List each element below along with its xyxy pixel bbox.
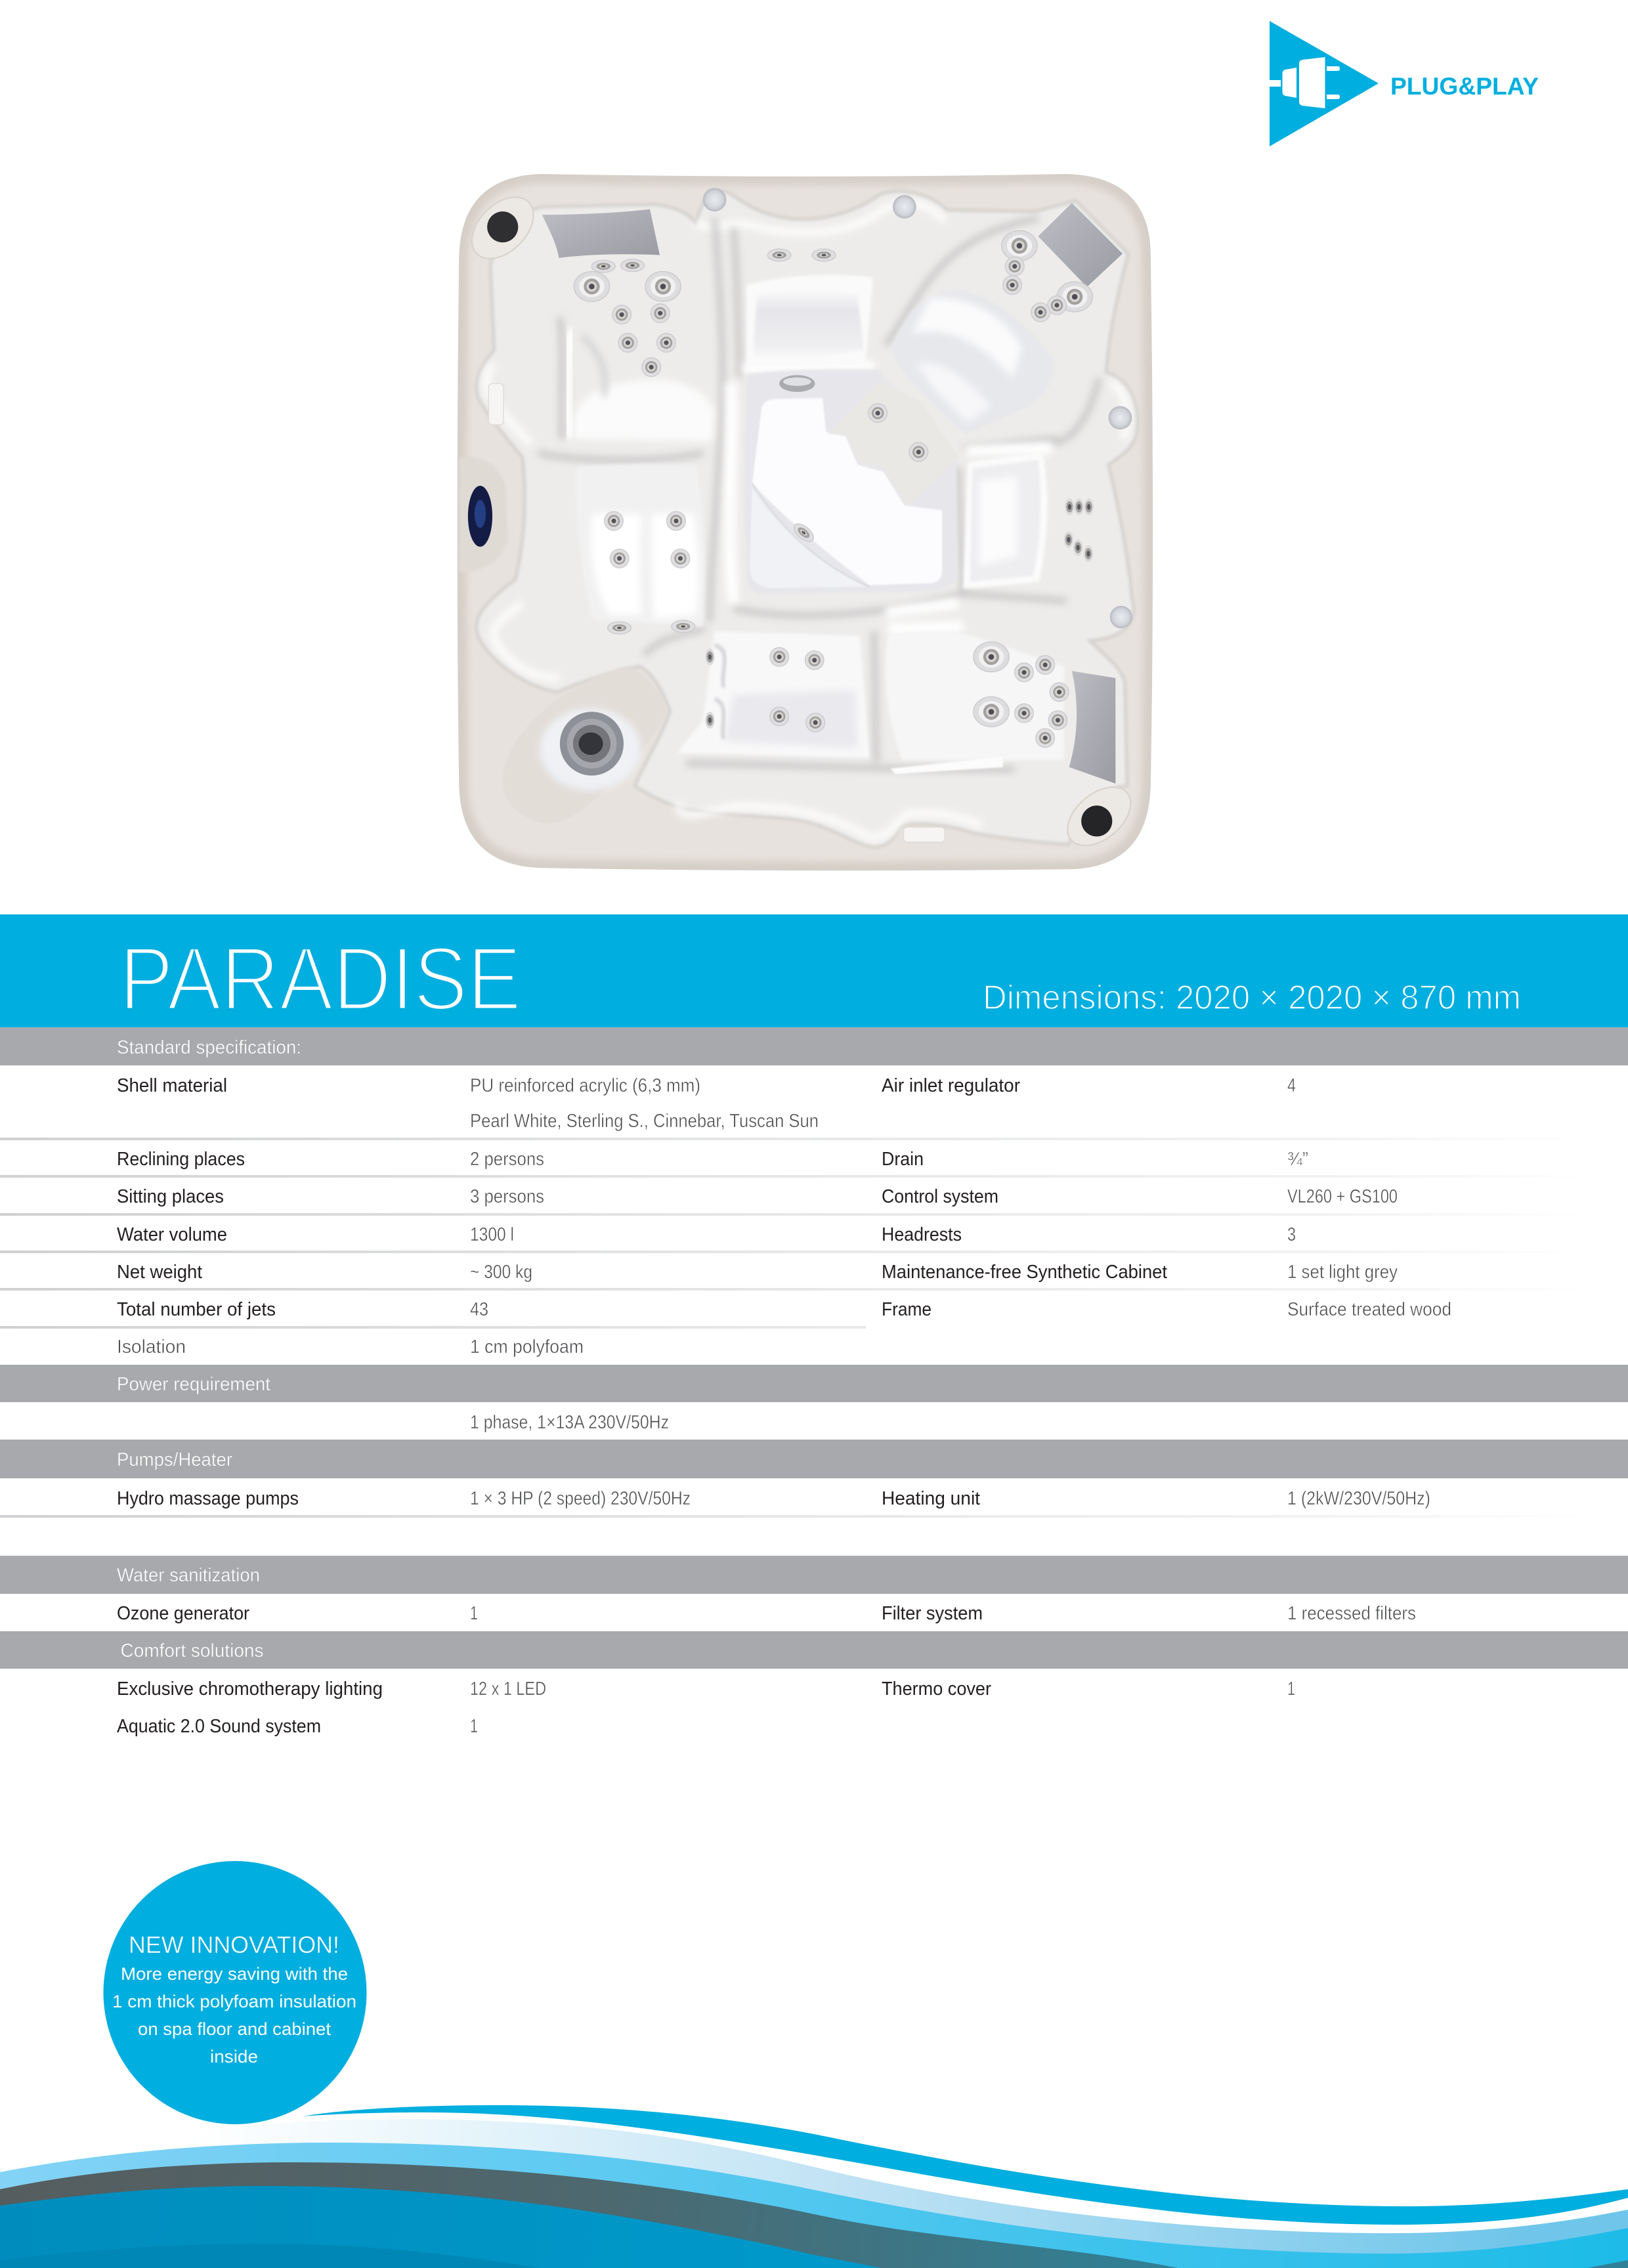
row: pumps and heating: Hydro massage pumps: [117, 1488, 299, 1509]
heading: comfort solutions: Comfort solutions: [121, 1640, 264, 1661]
section: power requirement: [117, 1374, 669, 1433]
row: lighting and cover: [117, 1679, 1295, 1700]
heading: water sanitization: Water sanitization: [117, 1565, 260, 1586]
tub basin: [477, 190, 1138, 847]
heading: standard specification: Standard specification:: [117, 1037, 301, 1058]
row: net weight: ~ 300 kg: [470, 1262, 532, 1283]
row: isolation: Isolation: [117, 1337, 186, 1358]
row: isolation: [117, 1337, 584, 1358]
rim ledge highlights: [486, 203, 1127, 838]
air regulator caps: [703, 188, 1132, 628]
title: PARADISE: PARADISE: [119, 929, 521, 1029]
callout body text: inside: [210, 2047, 258, 2066]
control panel recess: [459, 457, 508, 572]
row: pumps and heating: Heating unit: [882, 1488, 980, 1509]
row: isolation: 1 cm polyfoam: [470, 1337, 584, 1358]
row: sitting places: VL260 + GS100: [1287, 1186, 1398, 1207]
row: net weight: Maintenance-free Synthetic Cabinet: [882, 1262, 1167, 1283]
row: lighting and cover: Exclusive chromotherapy lighting: [117, 1679, 383, 1700]
seat: bottom right: [886, 632, 1064, 774]
row: ozone and filter: 1 recessed filters: [1287, 1603, 1416, 1624]
row: water volume: [117, 1224, 1296, 1245]
bottom ledge: [903, 827, 945, 842]
row: total number of jets: [117, 1299, 1451, 1320]
basin shading: [539, 219, 1099, 769]
section: pumps and heater: [117, 1449, 1430, 1509]
callout body text: More energy saving with the: [121, 1964, 348, 1984]
control panel: [468, 486, 492, 547]
row: pumps and heating: [117, 1488, 1430, 1509]
row: shell material: Air inlet regulator: [882, 1075, 1020, 1096]
filter bay: [503, 666, 668, 823]
tub outer rim: [452, 167, 1160, 875]
seat: top right: [890, 291, 1054, 434]
row: lighting and cover: 1: [1287, 1679, 1295, 1700]
logo: plug and play: [1270, 21, 1539, 146]
jets: left middle seat: [605, 511, 695, 634]
row: water volume: 3: [1287, 1224, 1296, 1245]
row: lighting and cover: Thermo cover: [882, 1679, 991, 1700]
row: reclining places: Drain: [882, 1149, 924, 1170]
jets: right middle seat: [1064, 498, 1094, 562]
jets: top centre: [767, 249, 836, 261]
row: shell material: Shell material: [117, 1075, 227, 1096]
row: shell material: PU reinforced acrylic (6,3 mm): [470, 1075, 700, 1096]
jets: steps: [868, 404, 928, 461]
floor fitting: [791, 521, 817, 545]
seat: left middle: [576, 464, 704, 626]
row: reclining places: Reclining places: [117, 1149, 245, 1170]
row: sound system: 1: [470, 1716, 478, 1737]
callout: new innovation: [104, 1861, 366, 2124]
section header bars: [0, 1027, 1628, 1669]
row: ozone and filter: Ozone generator: [117, 1603, 249, 1624]
row: sound system: [117, 1716, 478, 1737]
logo wordmark: PLUG&PLAY: [1390, 73, 1539, 100]
jets: top right seat: [1002, 230, 1092, 322]
headrest: top left: [542, 209, 660, 258]
row: ozone and filter: 1: [470, 1603, 478, 1624]
row: sitting places: [117, 1186, 1398, 1207]
row: shell material: 4: [1287, 1075, 1296, 1096]
jets: bottom right seat: [974, 642, 1069, 748]
row: water volume: Water volume: [117, 1224, 227, 1245]
filter: [540, 708, 641, 790]
callout body text: 1 cm thick polyfoam insulation: [112, 1992, 356, 2011]
callout heading: NEW INNOVATION!: [129, 1931, 339, 1958]
row: ozone and filter: Filter system: [882, 1603, 983, 1624]
headrest: top right: [1038, 203, 1123, 287]
row: reclining places: 2 persons: [470, 1149, 544, 1170]
row: water volume: Headrests: [882, 1224, 962, 1245]
drink holder: bottom right: [1057, 776, 1142, 857]
icon: play triangle with plug: [1270, 21, 1379, 146]
centre ridge highlight: [730, 366, 1052, 629]
row: total number of jets: Frame: [882, 1299, 932, 1320]
callout body text: [112, 1964, 356, 2066]
drink holder: top left: [460, 185, 545, 270]
headrest: bottom right: [1069, 671, 1115, 784]
row: sitting places: Control system: [882, 1186, 998, 1207]
row: power value: 1 phase, 1×13A 230V/50Hz: [470, 1412, 669, 1433]
row: ozone and filter: [117, 1603, 1416, 1624]
row: shell material: [117, 1075, 1296, 1132]
jets: bottom middle seat: [705, 647, 825, 732]
row: reclining places: ¾”: [1287, 1149, 1308, 1170]
row: lighting and cover: 12 x 1 LED: [470, 1679, 546, 1700]
section: standard specification: [117, 1037, 1451, 1358]
banner: model name and dimensions: [0, 914, 1628, 1029]
row: pumps and heating: 1 × 3 HP (2 speed) 230V/50Hz: [470, 1488, 691, 1509]
section: water sanitization: [117, 1565, 1416, 1624]
row: water volume: 1300 l: [470, 1224, 514, 1245]
footwell steps: [827, 381, 958, 505]
row: shell material: Pearl White, Sterling S., Cinnebar, Tuscan Sun: [470, 1111, 819, 1132]
callout body text: on spa floor and cabinet: [138, 2019, 331, 2039]
heading: pumps/heater: Pumps/Heater: [117, 1449, 232, 1470]
row: sitting places: Sitting places: [117, 1186, 224, 1207]
seat: upper centre: [746, 275, 873, 366]
light fitting: [779, 375, 815, 392]
row: sound system: Aquatic 2.0 Sound system: [117, 1716, 321, 1737]
row: total number of jets: Total number of jets: [117, 1299, 276, 1320]
dimensions: Dimensions: 2020 × 2020 × 870 mm: [983, 979, 1521, 1017]
side ledge: [488, 383, 503, 425]
row: sitting places: 3 persons: [470, 1186, 544, 1207]
seat: bottom middle: [677, 631, 869, 758]
heading: power requirement: Power requirement: [117, 1374, 270, 1395]
black cap: top left: [487, 211, 518, 242]
footwell: [744, 369, 958, 595]
black cap: bottom right: [1081, 805, 1112, 836]
row: reclining places: [117, 1149, 1308, 1170]
seat: right middle: [963, 452, 1047, 589]
seat: top left: [568, 329, 715, 441]
row: net weight: 1 set light grey: [1287, 1262, 1398, 1283]
bottom wave decoration: [0, 2105, 1628, 2268]
row: net weight: Net weight: [117, 1262, 202, 1283]
row: total number of jets: Surface treated wood: [1287, 1299, 1451, 1320]
row: total number of jets: 43: [470, 1299, 488, 1320]
illustration: hot tub top view: [452, 167, 1160, 875]
row: net weight: [117, 1262, 1398, 1283]
section: comfort solutions: [117, 1640, 1295, 1737]
jets: top left seat: [574, 259, 681, 377]
row: pumps and heating: 1 (2kW/230V/50Hz): [1287, 1488, 1430, 1509]
